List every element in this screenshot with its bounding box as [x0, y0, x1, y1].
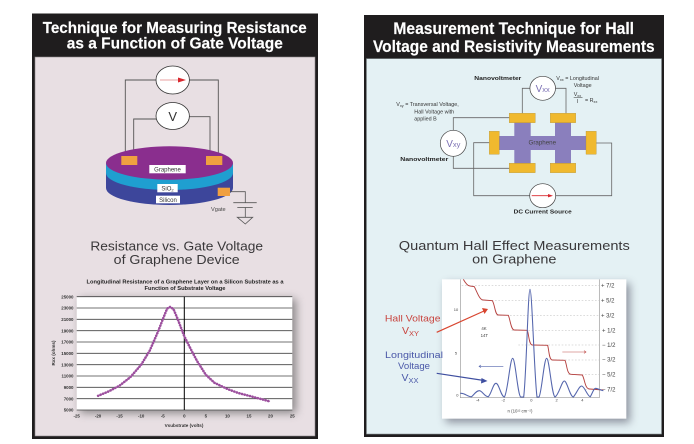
- y axis labels: 13000: [61, 362, 74, 367]
- contact pads: [121, 156, 230, 196]
- panel: quantum hall measurement: [364, 15, 664, 437]
- gate ground symbol: [230, 192, 257, 224]
- layer labels: SiO: [161, 186, 171, 192]
- y axis labels: 9000: [64, 385, 74, 390]
- y axis labels: 11000: [62, 374, 74, 379]
- label: Vxy description: = Transversal Voltage,: [404, 102, 459, 108]
- x axis labels: 20: [268, 414, 273, 418]
- heading: quantum hall section: on Graphene: [472, 252, 556, 266]
- layer labels: Graphene: [154, 167, 182, 173]
- right tick labels: + 1/2: [602, 328, 616, 334]
- x axis labels: [74, 414, 295, 418]
- left and bottom tick labels: -4: [476, 398, 480, 403]
- icon: DC current source: [530, 184, 556, 208]
- graphene hall bar: [498, 122, 587, 165]
- right tick labels: [601, 284, 616, 393]
- left and bottom tick labels: [454, 307, 584, 413]
- label: Vxy description: V: [396, 102, 400, 108]
- heading: resistance chart section: of Graphene Device: [114, 252, 240, 267]
- x axis labels: -20: [95, 414, 102, 418]
- label: Vxx description: V: [574, 92, 577, 98]
- layer labels: [149, 165, 186, 204]
- icon: Vxy meter: Vxy: [446, 139, 461, 150]
- y axis labels: 5000: [64, 408, 74, 413]
- heading: left panel title: [43, 20, 307, 52]
- chart: quantum Hall effect plot: [442, 279, 630, 423]
- x axis labels: 0: [183, 414, 186, 418]
- y axis labels: [61, 294, 74, 413]
- blue oscillation: longitudinal voltage: [460, 289, 603, 397]
- label: Vxy description: applied B: [414, 116, 437, 122]
- heading: right panel title: [373, 20, 655, 56]
- label: Vxx description: xx: [594, 100, 597, 104]
- panel: resistance vs gate voltage: [32, 14, 318, 439]
- axis titles: Vsubstrate (volts): [165, 423, 204, 428]
- x axis labels: -15: [116, 414, 123, 418]
- callout: longitudinal voltage: V: [401, 372, 408, 384]
- callout: longitudinal voltage: Longitudinal: [385, 350, 443, 361]
- left and bottom tick labels: 0: [530, 398, 533, 403]
- x axis labels: 5: [205, 414, 208, 418]
- label: Vxx description: = R: [585, 98, 594, 104]
- x axis labels: 10: [225, 414, 230, 418]
- y axis labels: 17000: [61, 340, 74, 345]
- chart title: [86, 280, 284, 292]
- y axis labels: 7000: [64, 396, 74, 401]
- line chart: resistance vs substrate voltage: Rxx (ohms): [51, 340, 56, 366]
- gate label: Vgate: [211, 207, 226, 213]
- graphene label: Graphene: [529, 140, 557, 146]
- wires: [453, 88, 612, 196]
- icon: voltmeter: V: [168, 109, 177, 124]
- left and bottom tick labels: 5: [455, 351, 458, 356]
- label: DC current source: DC Current Source: [514, 210, 572, 216]
- heading: resistance chart section: [90, 238, 263, 267]
- left and bottom tick labels: 14T: [481, 333, 488, 338]
- small direction arrows: [479, 351, 586, 368]
- line chart: resistance vs substrate voltage: [51, 280, 296, 428]
- left and bottom tick labels: 10: [454, 307, 459, 312]
- heading: left panel title: as a Function of Gate Voltage: [67, 36, 283, 52]
- callout: Hall voltage: V: [402, 325, 409, 337]
- label: Vxx description: xx: [560, 78, 564, 82]
- axes: [460, 279, 599, 398]
- right tick labels: + 5/2: [601, 298, 615, 304]
- left and bottom tick labels: 0: [456, 393, 459, 398]
- right tick labels: + 3/2: [601, 314, 615, 320]
- chart title: Longitudinal Resistance of a Graphene Layer on a Silicon Substrate as a: [86, 280, 284, 286]
- icon: Vxx meter: Vxx: [536, 84, 550, 95]
- diagram: graphene device circuit: [106, 66, 257, 224]
- right tick labels: + 7/2: [601, 284, 615, 290]
- dotted reference lines: [462, 286, 599, 389]
- heading: quantum hall section: Quantum Hall Effect Measurements: [399, 238, 630, 253]
- callout: Hall voltage: Hall Voltage: [385, 314, 441, 324]
- gold contact pads: [489, 113, 596, 173]
- heading: left panel title: Technique for Measuring Resistance: [43, 20, 307, 37]
- label: upper nanovoltmeter: Nanovoltmeter: [474, 76, 522, 82]
- callout: longitudinal voltage: [385, 350, 488, 385]
- heading: resistance chart section: Resistance vs. Gate Voltage: [90, 238, 263, 254]
- left and bottom tick labels: 2: [556, 398, 559, 403]
- x axis labels: 25: [290, 414, 295, 418]
- x axis labels: -10: [138, 414, 145, 418]
- y axis labels: 23000: [61, 306, 74, 311]
- y axis labels: 19000: [61, 328, 74, 333]
- label: Vxx description: xx: [577, 94, 581, 98]
- label: Vxx description: Voltage: [574, 83, 592, 89]
- callout: longitudinal voltage: XX: [408, 376, 419, 385]
- x axis labels: 15: [247, 414, 252, 418]
- x axis labels: -25: [74, 414, 80, 418]
- label: Vxx description: I: [576, 99, 578, 105]
- layer labels: Silicon: [159, 198, 177, 204]
- chart title: Function of Substrate Voltage: [144, 286, 226, 292]
- icon: Vxx meter: [530, 76, 556, 100]
- label: lower nanovoltmeter: Nanovoltmeter: [400, 157, 449, 163]
- right tick labels: − 7/2: [602, 387, 616, 393]
- right tick labels: − 1/2: [602, 343, 616, 349]
- left and bottom tick labels: -2: [502, 398, 506, 403]
- layered disk device: [106, 146, 233, 205]
- label: Vxy description: Hall Voltage with: [414, 110, 454, 116]
- y axis labels: 25000: [61, 294, 74, 299]
- wires: [125, 80, 218, 160]
- red staircase: Hall voltage: [463, 279, 603, 390]
- y axis labels: 21000: [61, 317, 74, 322]
- right tick labels: − 3/2: [602, 358, 616, 364]
- heading: right panel title: Voltage and Resistivity Measurements: [373, 38, 655, 56]
- label: Vxx description: [556, 76, 599, 105]
- icon: current source meter: [156, 66, 189, 94]
- callout: Hall voltage: [385, 308, 488, 338]
- heading: right panel title: Measurement Technique for Hall: [393, 20, 634, 38]
- label: Vxx description: V: [556, 76, 560, 82]
- callout: Hall voltage: XY: [409, 329, 419, 338]
- y axis labels: 15000: [61, 351, 74, 356]
- label: Vxy description: [396, 102, 459, 122]
- heading: quantum hall section: [399, 238, 630, 266]
- left and bottom tick labels: n (10¹² cm⁻²): [508, 408, 533, 413]
- icon: Vxy meter: [440, 130, 466, 156]
- diagram: Hall bar circuit: [396, 76, 612, 216]
- label: Vxy description: xy: [400, 104, 404, 108]
- data curve: [98, 307, 270, 402]
- icon: voltmeter: [156, 102, 189, 130]
- right tick labels: − 5/2: [602, 373, 616, 379]
- x axis labels: -5: [161, 414, 165, 418]
- left and bottom tick labels: 4K: [481, 326, 487, 331]
- layer labels: 2: [171, 187, 174, 192]
- callout: longitudinal voltage: Voltage: [398, 361, 430, 372]
- label: Vxx description: = Longitudinal: [564, 76, 599, 82]
- left and bottom tick labels: 4: [581, 398, 584, 403]
